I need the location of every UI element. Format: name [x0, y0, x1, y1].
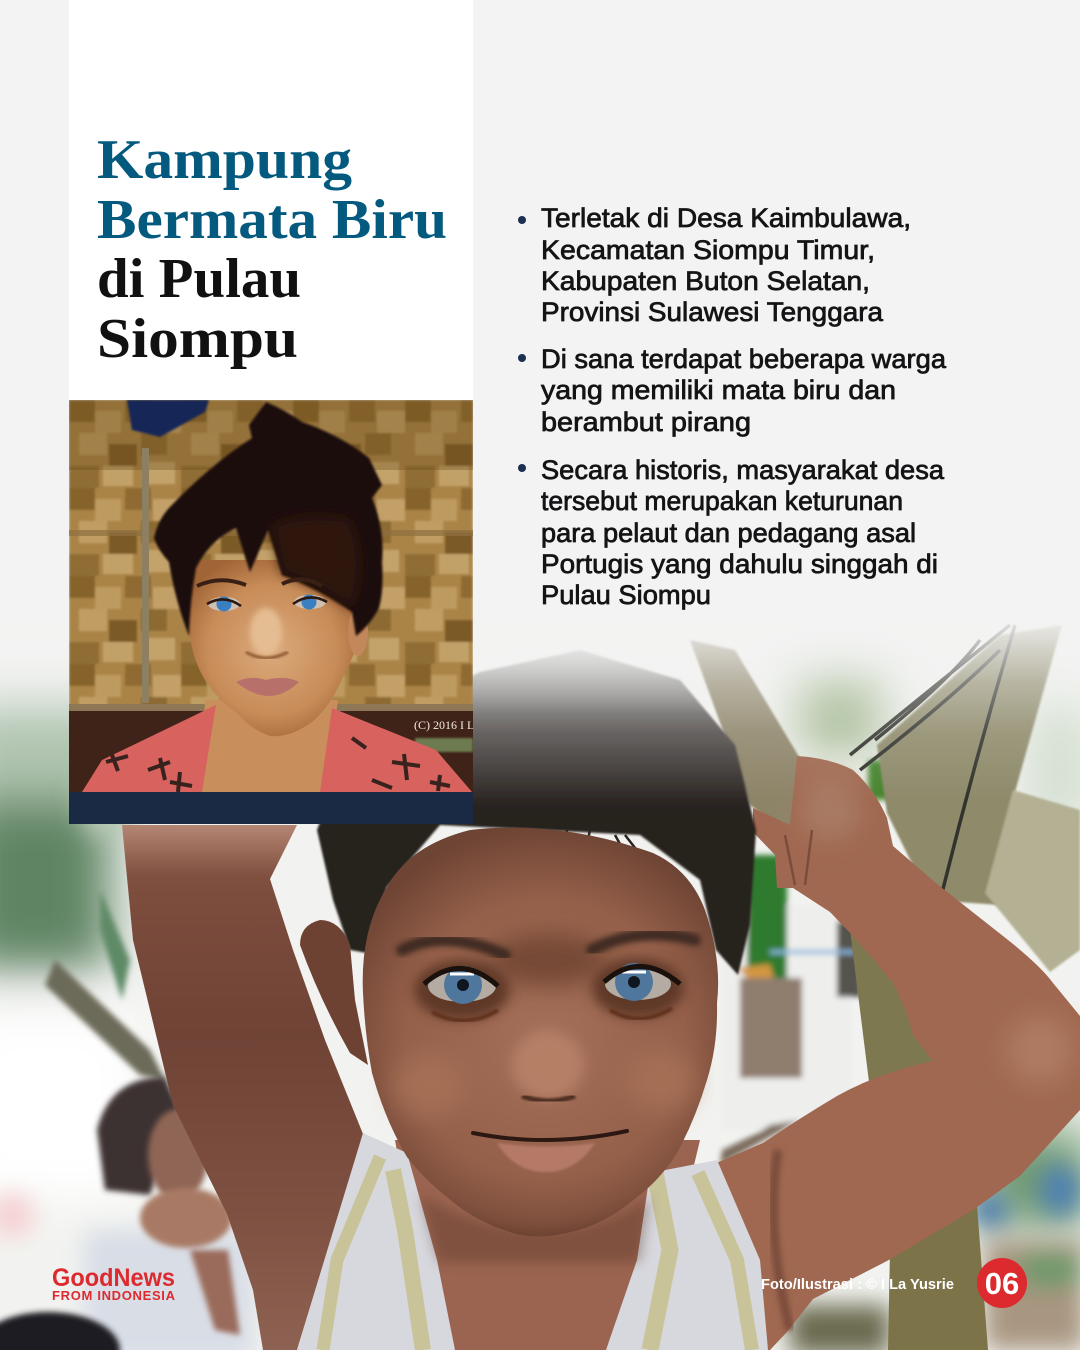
- dark hair: [317, 650, 756, 975]
- bullet 1: Provinsi Sulawesi Tenggara: [541, 297, 884, 327]
- dark bench: [69, 704, 473, 794]
- photo copyright: (C) 2016 I L: [414, 718, 474, 732]
- page number badge: [977, 1258, 1027, 1308]
- photo backdrop foliage and buildings: [0, 610, 1080, 1350]
- nose: [246, 608, 288, 658]
- GoodNews from Indonesia logo: GoodNews: [52, 1264, 175, 1292]
- raised right arm and hand: [700, 756, 1080, 1350]
- woven bamboo wall: [69, 400, 473, 710]
- gradient fade over photo: [0, 610, 1080, 800]
- pink shirt: [82, 705, 472, 792]
- smile: [473, 1131, 627, 1172]
- inset photo: girl with blue eyes: [69, 400, 474, 794]
- chest and torso: [395, 1140, 700, 1350]
- ear: [300, 920, 368, 1065]
- neck: [200, 700, 338, 792]
- GoodNews from Indonesia logo: FROM INDONESIA: [52, 1288, 176, 1303]
- title: Siompu: [97, 308, 298, 370]
- bullet 2: Di sana terdapat beberapa warga: [541, 344, 947, 374]
- title: [97, 129, 447, 370]
- bullet 1: [518, 203, 911, 327]
- blurred child in background: [0, 1077, 240, 1350]
- title: Bermata Biru: [97, 189, 447, 251]
- navy bar under inset photo: [69, 792, 473, 824]
- bullet 3: [518, 455, 945, 610]
- bullet 3: Pulau Siompu: [541, 580, 711, 610]
- main photo: boy with blue eyes: [0, 610, 1080, 1350]
- title: di Pulau: [97, 248, 301, 310]
- bullet 3: para pelaut dan pedagang asal: [541, 518, 916, 548]
- bullet 1: Kecamatan Siompu Timur,: [541, 235, 875, 265]
- photo credit: Foto/Ilustrasi : © I La Yusrie: [761, 1276, 954, 1293]
- bullet 2: [518, 344, 947, 437]
- bullet 3: Portugis yang dahulu singgah di: [541, 549, 938, 579]
- neck shadow: [420, 1195, 650, 1262]
- dark hair with bun: [154, 402, 383, 636]
- right eye and brow: [592, 934, 695, 1019]
- ear: [348, 613, 368, 656]
- left eye and brow: [402, 940, 510, 1021]
- blue bucket: [127, 400, 209, 437]
- left eye and brow: [197, 580, 246, 612]
- face: [363, 828, 718, 1236]
- right eye and brow: [282, 579, 327, 610]
- bullet 2: berambut pirang: [541, 407, 751, 437]
- nose: [512, 1031, 584, 1101]
- lips: [236, 678, 299, 696]
- raised left arm: [122, 825, 363, 1350]
- bullet 3: Secara historis, masyarakat desa: [541, 455, 945, 485]
- title: Kampung: [97, 129, 352, 191]
- page number badge: 06: [985, 1266, 1019, 1301]
- bullet 3: tersebut merupakan keturunan: [541, 486, 903, 516]
- tree trunk and branches: [690, 625, 1080, 1350]
- bullet 1: Terletak di Desa Kaimbulawa,: [541, 203, 911, 233]
- bullet 1: Kabupaten Buton Selatan,: [541, 266, 870, 296]
- GoodNews from Indonesia logo: [52, 1264, 176, 1303]
- bullet list: [518, 203, 947, 610]
- white tank top: [297, 1133, 768, 1350]
- face: [189, 560, 362, 736]
- bullet 2: yang memiliki mata biru dan: [541, 375, 896, 405]
- white title panel: [69, 0, 473, 400]
